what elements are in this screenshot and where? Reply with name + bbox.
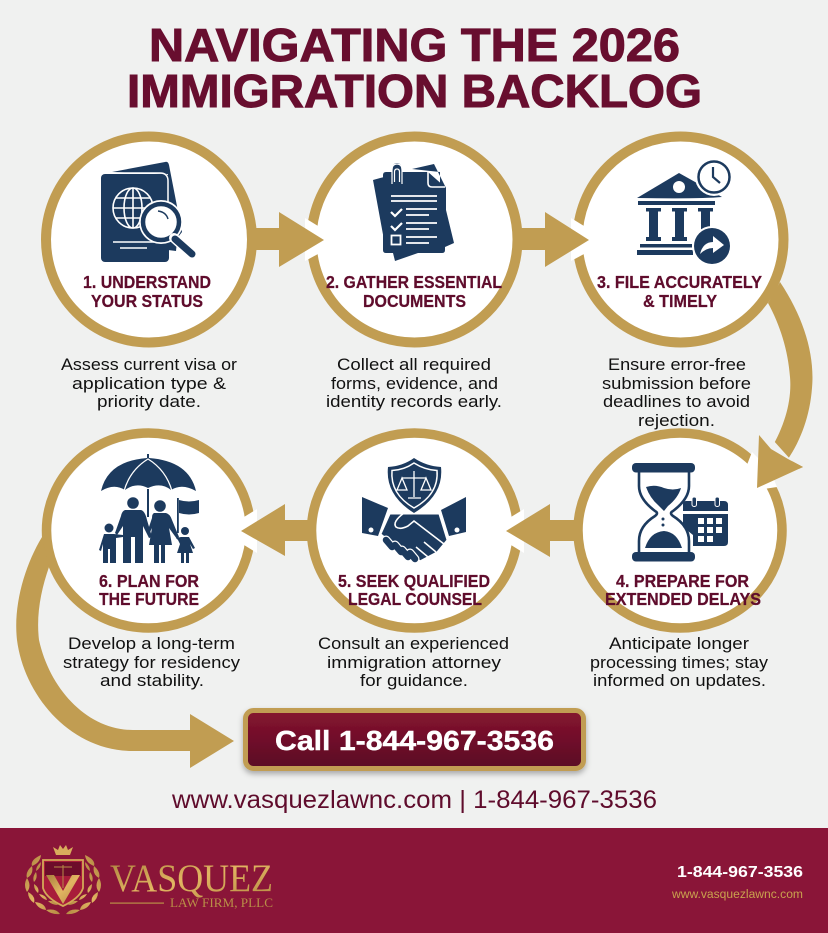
title: IMMIGRATION BACKLOG [127, 65, 702, 117]
description: step 3 [602, 355, 751, 430]
arrow head: step 3 to step 4 [757, 435, 803, 488]
step 3 label [597, 272, 762, 311]
arrow: step 4 to step 5 [497, 504, 575, 557]
curved arrow: step 6 to call button [16, 537, 234, 768]
step 3 circle [578, 136, 784, 342]
description: step 1: priority date. [97, 392, 201, 411]
website and phone line: www.vasquezlawnc.com | 1-844-967-3536 [171, 786, 657, 814]
step 1 label: 1. UNDERSTAND [83, 272, 211, 292]
step 4 label: 4. PREPARE FOR [616, 571, 749, 591]
description: step 5: for guidance. [360, 671, 468, 690]
step 1 circle [46, 136, 252, 342]
step 4 label: EXTENDED DELAYS [605, 589, 761, 609]
step 5 label [338, 571, 490, 609]
arrow: step 2 to step 3 [520, 212, 598, 267]
crown [53, 845, 73, 855]
step 6 label [99, 571, 199, 609]
description: step 2: forms, evidence, and [331, 374, 498, 393]
footer band [0, 828, 828, 933]
step 2 label: 2. GATHER ESSENTIAL [326, 272, 502, 292]
call button [246, 710, 584, 768]
step 6 label: 6. PLAN FOR [99, 571, 199, 591]
arrow: step 1 to step 2 [255, 212, 332, 267]
description: step 2: identity records early. [326, 392, 502, 411]
step 5 label: 5. SEEK QUALIFIED [338, 571, 490, 591]
step 5 circle [312, 433, 518, 628]
step 5 label: LEGAL COUNSEL [348, 589, 482, 609]
description: step 4: Anticipate longer [609, 634, 749, 653]
step 4 circle [578, 430, 803, 628]
description: step 3: Ensure error-free [608, 355, 746, 374]
step 6 circle [46, 433, 250, 628]
description: step 6: strategy for residency [63, 653, 241, 672]
description: step 1: Assess current visa or [61, 355, 237, 374]
call button: Call 1-844-967-3536 [275, 725, 554, 756]
description: step 6: Develop a long-term [68, 634, 235, 653]
title: NAVIGATING THE 2026 [149, 19, 680, 71]
description: step 4 [590, 634, 769, 690]
description: step 5: Consult an experienced [318, 634, 509, 653]
logo wordmark: VASQUEZ [110, 857, 273, 900]
step 2 circle [312, 136, 518, 342]
shield [43, 860, 83, 906]
step 1 label [83, 272, 211, 311]
description: step 4: informed on updates. [593, 671, 766, 690]
icon: family under umbrella [99, 454, 199, 563]
description: step 2 [326, 355, 502, 411]
laurel wreath right [66, 855, 101, 914]
logo wordmark: LAW FIRM, PLLC [170, 895, 273, 910]
step 3 label: 3. FILE ACCURATELY [597, 272, 762, 292]
icon: passport with globe and magnifier [101, 162, 193, 262]
footer website: www.vasquezlawnc.com [671, 889, 803, 901]
step 2 label [326, 272, 502, 311]
description: step 5 [318, 634, 509, 690]
description: step 3: rejection. [638, 411, 715, 430]
step 4 label [605, 571, 761, 609]
description: step 6: and stability. [100, 671, 204, 690]
icon: shield with scales above handshake [362, 458, 466, 562]
description: step 4: processing times; stay [590, 653, 769, 672]
step 3 label: & TIMELY [643, 291, 717, 311]
description: step 2: Collect all required [337, 355, 491, 374]
description: step 3: submission before [602, 374, 751, 393]
title [127, 19, 702, 117]
description: step 5: immigration attorney [327, 653, 502, 672]
icon: documents with checklist [373, 163, 454, 261]
step 6 label: THE FUTURE [99, 589, 199, 609]
logo crest [25, 845, 101, 914]
description: step 1: application type & [72, 374, 227, 393]
step 1 label: YOUR STATUS [91, 291, 203, 311]
footer phone: 1-844-967-3536 [677, 864, 803, 881]
arrow: step 5 to step 6 [231, 504, 309, 556]
description: step 1 [61, 355, 237, 411]
laurel wreath left [25, 855, 60, 914]
description: step 6 [63, 634, 241, 690]
icon: hourglass and calendar [632, 463, 728, 562]
curved arrow: step 3 to step 4 (body) [757, 282, 812, 488]
description: step 3: deadlines to avoid [603, 392, 750, 411]
step 2 label: DOCUMENTS [363, 291, 466, 311]
icon: courthouse with clock and arrow [637, 158, 733, 266]
